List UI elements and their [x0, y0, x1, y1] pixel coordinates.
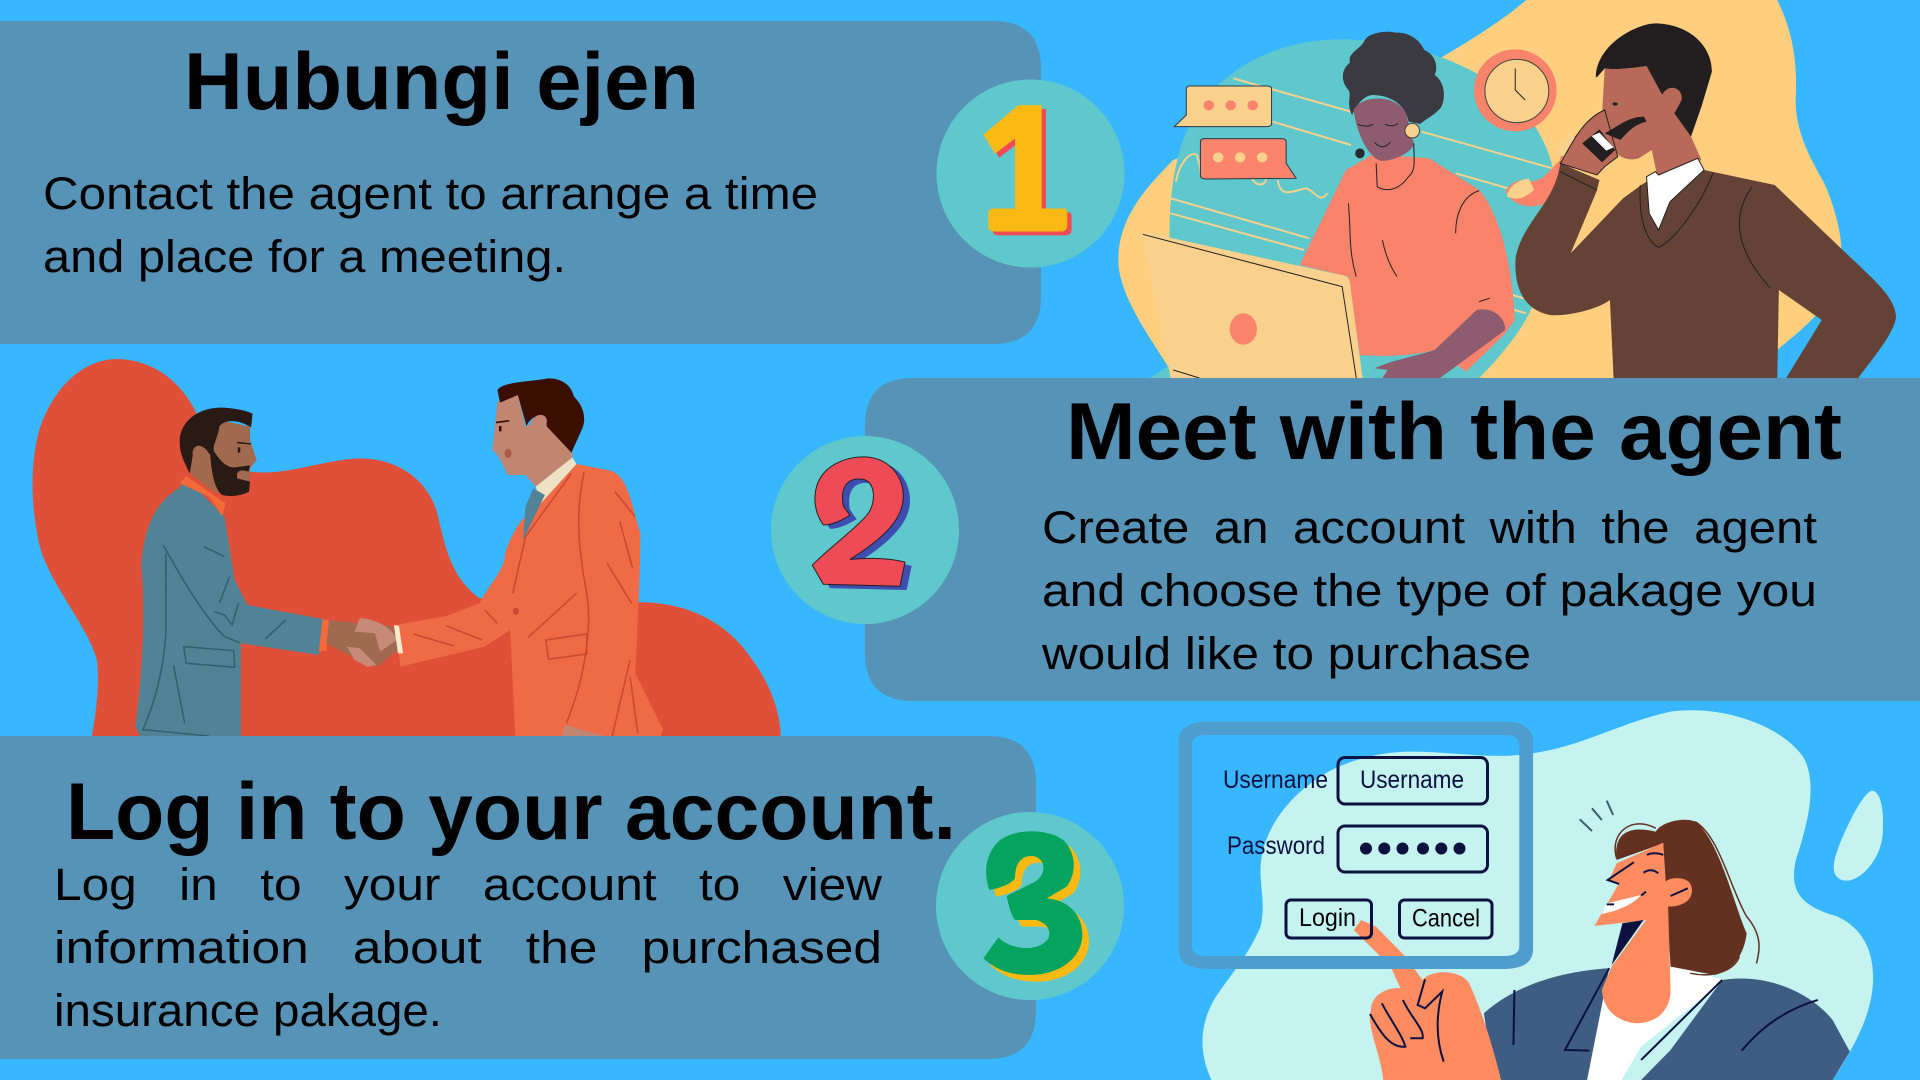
man in teal suit — [135, 408, 329, 736]
man in orange suit — [395, 378, 663, 736]
water drop blob — [1834, 791, 1883, 881]
stripes on blob — [1171, 78, 1552, 313]
text block: step 2 body: and choose the type of pakage you — [1042, 565, 1817, 616]
suit fold lines — [143, 545, 286, 736]
icon: coral chat bubble — [1200, 139, 1296, 179]
ear — [531, 415, 547, 434]
button — [513, 608, 519, 615]
cancel text: Cancel — [1412, 904, 1480, 932]
face lines — [1513, 853, 1818, 1060]
badge: number 1 — [936, 80, 1124, 268]
red background blob — [33, 359, 781, 736]
hair strand — [1615, 822, 1759, 975]
text block: step 3 body: information about the purchased — [54, 922, 882, 973]
laptop — [1142, 232, 1363, 378]
digit 3 — [983, 831, 1089, 982]
password field — [1338, 826, 1488, 872]
illustration: call center agent and man on phone — [1118, 0, 1896, 378]
hand — [1375, 309, 1505, 378]
tie — [523, 488, 545, 540]
face and neck — [1354, 99, 1414, 161]
neck shadow — [1612, 920, 1644, 965]
illustration: two men shaking hands — [33, 359, 781, 736]
suit fold lines — [413, 472, 638, 736]
heading: step 2: Meet with the agent — [1066, 387, 1842, 477]
shirt collar — [180, 476, 226, 516]
shirt — [1585, 965, 1725, 1080]
digit 1 — [983, 105, 1072, 235]
hair — [1616, 820, 1747, 975]
text block: step 1 body — [43, 168, 818, 282]
icon: yellow chat bubble — [1174, 86, 1272, 127]
jacket — [395, 464, 663, 736]
icon: wall clock — [1474, 49, 1557, 131]
username value: Username — [1360, 766, 1464, 794]
login button — [1286, 900, 1372, 938]
panel: step 3 — [0, 736, 1036, 1059]
hair — [1343, 32, 1444, 124]
face and neck — [1602, 66, 1701, 175]
handshake — [327, 618, 605, 736]
badge: number 2 — [771, 436, 959, 624]
panel: step 1 — [0, 21, 1041, 344]
login text: Login — [1299, 904, 1356, 932]
face and neck — [1594, 843, 1692, 1023]
phone — [1582, 129, 1615, 162]
text block: step 3 body — [54, 859, 883, 1036]
woman agent — [1300, 32, 1515, 378]
pointing hand — [1354, 920, 1501, 1080]
yellow background blob — [1118, 0, 1842, 378]
username label: Username — [1223, 766, 1328, 794]
password dots — [1360, 842, 1466, 854]
mustache — [1605, 117, 1647, 140]
text block: step 3 body: insurance pakage. — [54, 985, 442, 1036]
cancel button — [1400, 900, 1492, 938]
badge: number 3 — [936, 812, 1124, 1000]
login form frame — [1178, 722, 1533, 969]
hand — [1560, 110, 1618, 175]
collar — [1647, 158, 1704, 230]
man on the phone — [1515, 23, 1896, 378]
text block: step 1 body: and place for a meeting. — [43, 231, 566, 282]
text block: step 2 body: would like to purchase — [1041, 628, 1531, 679]
text block: step 2 body: Create an account with the agent — [1042, 502, 1818, 553]
text block: step 2 body — [1041, 502, 1818, 679]
hair and beard — [180, 408, 253, 496]
hair — [497, 378, 584, 453]
cuff — [319, 619, 329, 652]
eye — [237, 442, 251, 453]
text block: step 1 body: Contact the agent to arrange a time — [43, 168, 818, 219]
hair — [1596, 23, 1712, 137]
face — [492, 395, 572, 487]
heading: step 3: Log in to your account. — [66, 767, 956, 857]
woman — [1484, 801, 1850, 1080]
username field — [1338, 758, 1488, 804]
password label: Password — [1227, 832, 1325, 860]
shirt collar — [536, 457, 577, 503]
pale teal blob — [1202, 710, 1873, 1080]
earring and headset mic — [1405, 123, 1420, 138]
sweater — [1300, 155, 1515, 372]
jacket — [1484, 968, 1609, 1080]
illustration: woman logging in — [1178, 710, 1883, 1080]
face — [190, 420, 257, 497]
eye and cheek — [496, 420, 509, 431]
excitement ticks — [1580, 801, 1613, 831]
panel: step 2 — [865, 378, 1920, 701]
smile — [1602, 895, 1641, 914]
sweater — [1515, 163, 1896, 378]
digit 2 — [812, 457, 912, 590]
jacket — [135, 478, 324, 736]
teal background blob — [1150, 39, 1555, 378]
text block: step 3 body: Log in to your account to view — [54, 859, 883, 910]
sweater neckline — [1560, 172, 1770, 288]
login form fields — [1223, 758, 1492, 938]
coral hand props — [1505, 135, 1584, 206]
heading: step 1: Hubungi ejen — [184, 37, 699, 127]
